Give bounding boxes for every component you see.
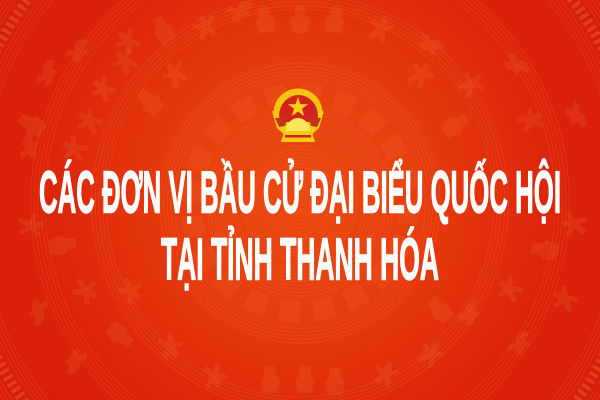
emblem side leaves (272, 111, 324, 139)
emblem ribbon band (285, 135, 311, 138)
title (39, 158, 561, 292)
emblem red wings (275, 117, 321, 127)
emblem red field (279, 95, 318, 122)
national emblem (272, 88, 324, 142)
emblem star (288, 97, 308, 116)
emblem cogwheel (286, 118, 310, 131)
emblem ribbon (281, 132, 315, 142)
emblem outer gold wreath (274, 88, 322, 138)
